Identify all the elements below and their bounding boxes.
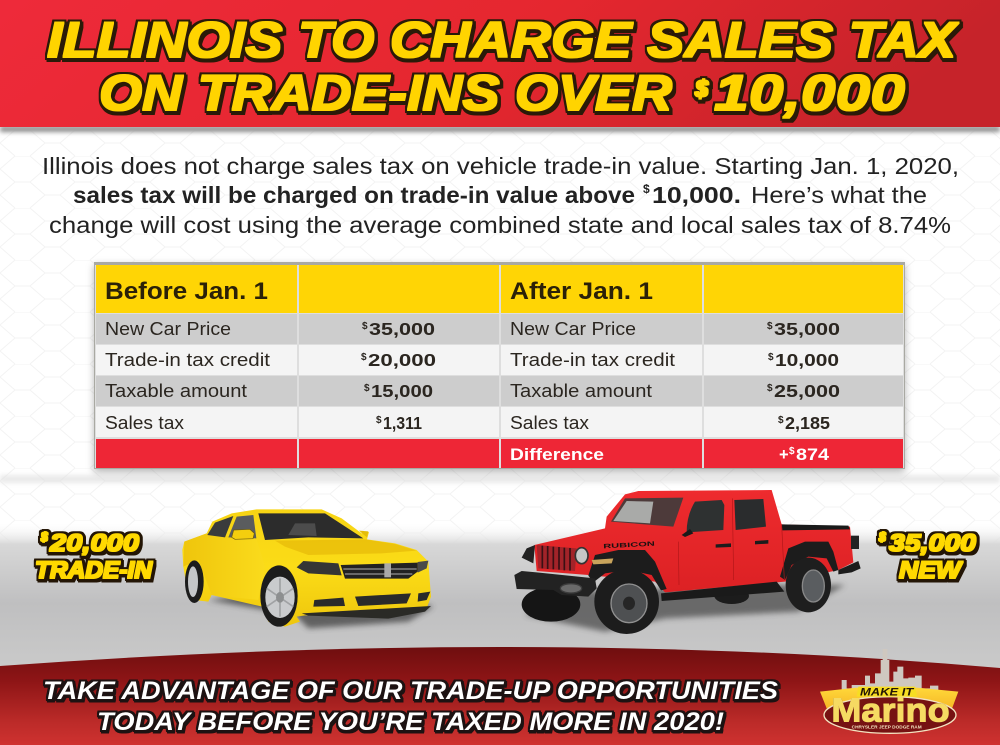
title: ILLINOIS TO CHARGE SALES TAX bbox=[47, 12, 959, 68]
label: $35,000 new: 35,000 bbox=[889, 530, 977, 557]
row: trade-in tax credit: $ bbox=[768, 352, 774, 363]
door windows bbox=[687, 500, 724, 532]
intro text bbox=[42, 153, 959, 238]
windshield bbox=[258, 513, 363, 540]
car body bbox=[182, 509, 431, 627]
row: trade-in tax credit: 20,000 bbox=[368, 350, 436, 370]
row: difference: Difference bbox=[510, 446, 604, 464]
row: new car price: $ bbox=[767, 321, 773, 332]
row: new car price: $ bbox=[362, 321, 368, 332]
red oval bbox=[824, 697, 956, 733]
make it band bbox=[857, 687, 917, 697]
header row: before and after bbox=[96, 265, 903, 313]
row: new car price bbox=[96, 314, 903, 344]
row: taxable amount: 25,000 bbox=[774, 381, 840, 401]
row: difference bbox=[96, 439, 903, 468]
grille bbox=[341, 563, 418, 579]
label: $35,000 new: NEW bbox=[899, 557, 964, 584]
row: sales tax: Sales tax bbox=[510, 413, 589, 433]
row: difference: $ bbox=[789, 446, 795, 457]
intro text: change will cost using the average combined state and local sales tax of 8.74% bbox=[49, 212, 951, 238]
footer call to action: TODAY BEFORE YOU’RE TAXED MORE IN 2020! bbox=[97, 708, 724, 736]
Marino wordmark: Marino bbox=[831, 693, 950, 730]
row: new car price: 35,000 bbox=[774, 319, 840, 339]
row: sales tax: 1,311 bbox=[383, 413, 422, 433]
row: taxable amount: Taxable amount bbox=[105, 381, 247, 401]
footer call to action bbox=[43, 677, 778, 736]
door lines and handles bbox=[716, 540, 768, 548]
label: $20,000 trade-in: TRADE-IN bbox=[35, 557, 153, 584]
gold ribbon bbox=[820, 688, 958, 718]
row: difference: 874 bbox=[796, 446, 830, 464]
headlights bbox=[297, 561, 342, 575]
row: taxable amount: 15,000 bbox=[371, 381, 433, 401]
label: $35,000 new bbox=[878, 530, 977, 584]
row: new car price: 35,000 bbox=[369, 319, 435, 339]
header row: before and after: After Jan. 1 bbox=[510, 278, 653, 305]
row: sales tax: $ bbox=[778, 415, 784, 426]
intro text: Here’s what the bbox=[751, 182, 927, 208]
hood highlight bbox=[275, 539, 417, 555]
yellow car bbox=[182, 509, 433, 628]
title: 10,000 bbox=[714, 65, 905, 121]
windshield bbox=[611, 498, 683, 527]
intro text: $ bbox=[643, 182, 650, 196]
row: taxable amount: Taxable amount bbox=[510, 381, 652, 401]
row: new car price: New Car Price bbox=[510, 319, 636, 339]
bumper and side step bbox=[514, 571, 597, 597]
logo: Make It Marino: MAKE IT bbox=[860, 687, 915, 699]
intro text: 10,000. bbox=[652, 182, 741, 208]
cab and body bbox=[534, 490, 853, 592]
comparison table bbox=[94, 262, 905, 472]
intro text: Illinois does not charge sales tax on vehicle trade-in value. Starting Jan. 1, 2020, bbox=[42, 153, 959, 179]
row: trade-in tax credit bbox=[96, 345, 903, 375]
lower bumper vents bbox=[313, 598, 345, 607]
grille bbox=[537, 545, 577, 571]
logo: Make It Marino: CHRYSLER JEEP DODGE RAM bbox=[852, 724, 922, 729]
label: $35,000 new: $ bbox=[878, 530, 886, 544]
intro text: sales tax will be charged on trade-in value above bbox=[73, 182, 635, 208]
label: $20,000 trade-in bbox=[35, 530, 153, 584]
row: taxable amount: $ bbox=[364, 383, 370, 394]
row: sales tax: Sales tax bbox=[105, 413, 184, 433]
mirrors bbox=[232, 529, 254, 539]
row: taxable amount: $ bbox=[767, 383, 773, 394]
row: sales tax: $ bbox=[376, 415, 382, 426]
red jeep truck bbox=[514, 490, 861, 634]
row: trade-in tax credit: Trade-in tax credit bbox=[510, 350, 675, 370]
fender flares bbox=[588, 550, 667, 590]
truck bed rail bbox=[782, 524, 850, 530]
skyline bbox=[842, 649, 938, 692]
title: ON TRADE-INS OVER bbox=[99, 65, 672, 121]
side windows bbox=[207, 516, 233, 537]
side panel shading bbox=[183, 533, 265, 600]
row: trade-in tax credit: Trade-in tax credit bbox=[105, 350, 270, 370]
logo: Make It Marino bbox=[820, 649, 958, 733]
wheels bbox=[185, 560, 298, 627]
footer banner bbox=[0, 647, 1000, 745]
row: sales tax bbox=[96, 407, 903, 437]
header banner bbox=[0, 0, 1000, 132]
row: taxable amount bbox=[96, 376, 903, 406]
RUBICON decal: RUBICON bbox=[603, 541, 656, 550]
header row: before and after: Before Jan. 1 bbox=[105, 278, 268, 305]
footer call to action: TAKE ADVANTAGE OF OUR TRADE-UP OPPORTUNITIES bbox=[43, 677, 778, 705]
row: difference: + bbox=[779, 446, 789, 464]
title bbox=[47, 12, 959, 121]
row: new car price: New Car Price bbox=[105, 319, 231, 339]
row: trade-in tax credit: 10,000 bbox=[775, 350, 839, 370]
wheels bbox=[594, 558, 831, 634]
title: $ bbox=[694, 76, 709, 103]
label: $20,000 trade-in: $ bbox=[40, 530, 48, 544]
far-side wheels bbox=[522, 587, 749, 622]
label: $20,000 trade-in: 20,000 bbox=[49, 530, 140, 557]
row: trade-in tax credit: $ bbox=[361, 352, 367, 363]
row: sales tax: 2,185 bbox=[785, 413, 830, 433]
